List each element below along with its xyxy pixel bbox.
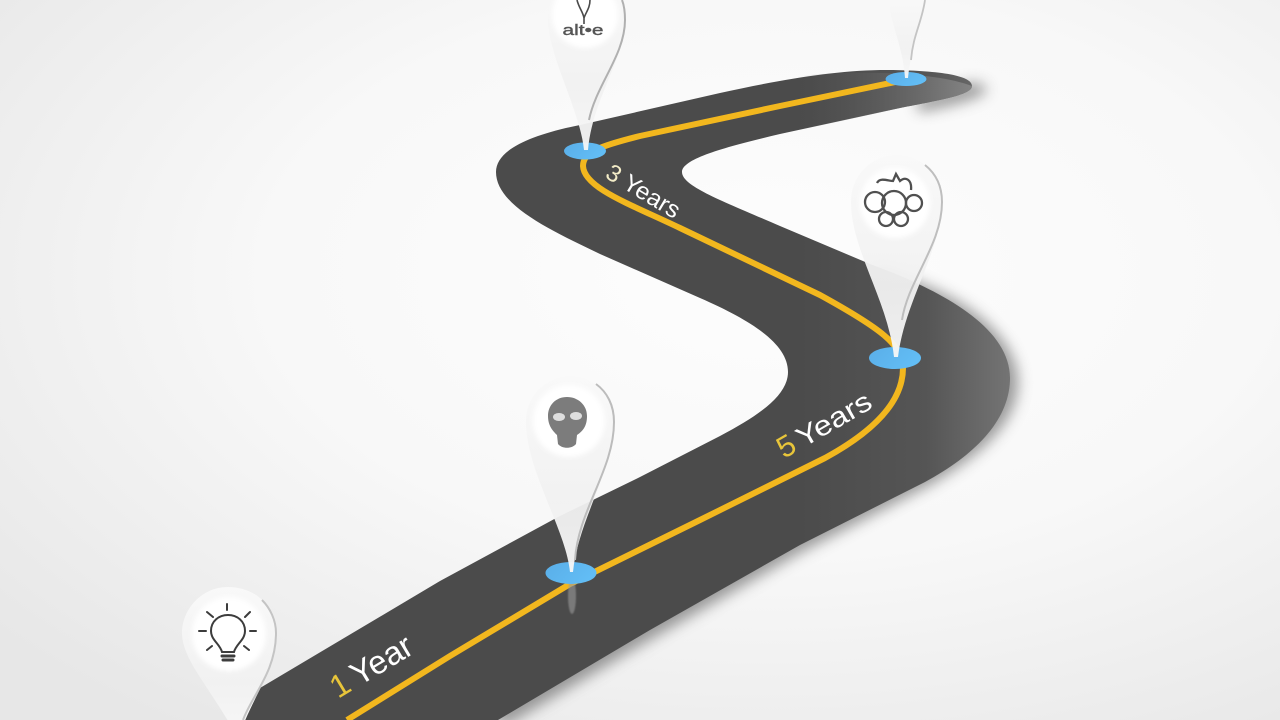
milestone 1 label (323, 627, 419, 705)
milestone 1 pin (182, 587, 276, 720)
milestone 5 label: Years (791, 385, 877, 453)
milestone 5 label: 5 (771, 428, 802, 465)
icon: cropped symbol: alt•e (562, 22, 604, 39)
milestone 3 label: 3 (601, 159, 626, 189)
milestone 4 pin (851, 155, 942, 369)
road centre line (347, 80, 905, 720)
milestone 3 pin (548, 0, 626, 160)
icon: light bulb (199, 604, 256, 660)
road (245, 70, 1010, 720)
milestone 1 label: Year (343, 627, 419, 693)
road shadow (490, 83, 1018, 720)
milestone 2 pin (526, 376, 614, 614)
milestone 3 label (601, 159, 685, 224)
icon: flower (865, 174, 922, 226)
milestone 3 label: Years (618, 169, 685, 224)
milestone 5 label (771, 384, 878, 465)
milestone 5 pin (886, 0, 926, 86)
road far-end highlight (800, 73, 972, 130)
milestone 1 label: 1 (323, 665, 357, 705)
icon: skull (548, 397, 587, 448)
icon: cropped symbol (562, 0, 604, 39)
